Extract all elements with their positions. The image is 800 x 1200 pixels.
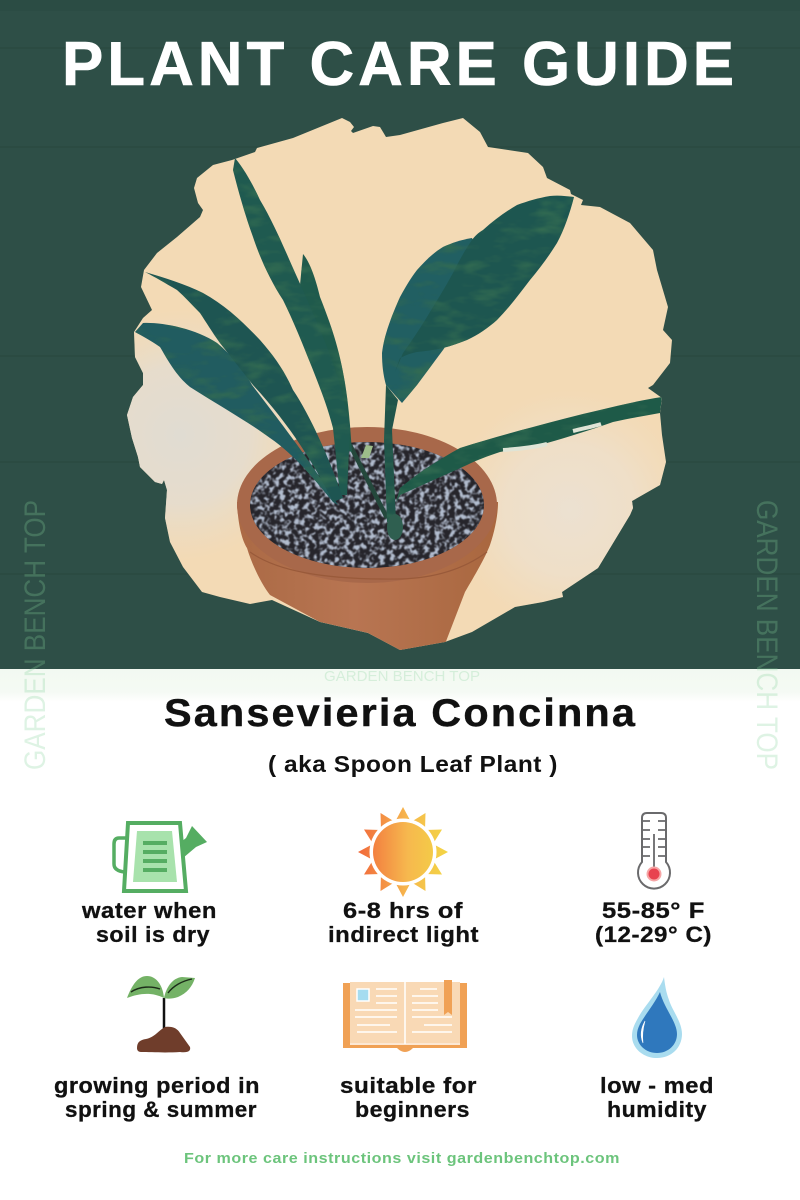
watermark: left vertical: GARDEN BENCH TOP xyxy=(19,500,52,770)
leaves xyxy=(135,158,662,522)
label: humidity: humidity xyxy=(607,1097,707,1122)
label: temperature: 55-85° F xyxy=(602,898,705,923)
background: dark green wood planks xyxy=(0,0,800,670)
watermark: right vertical: GARDEN BENCH TOP xyxy=(750,500,783,770)
leaf white streak xyxy=(503,424,601,450)
lower white panel xyxy=(0,669,800,1200)
label: growing period xyxy=(54,1073,260,1122)
plant alias subheading: ( aka Spoon Leaf Plant ) xyxy=(268,751,558,777)
icon: thermometer xyxy=(638,813,670,889)
icon: sun xyxy=(358,807,448,897)
label: watering: water when xyxy=(81,898,217,923)
label: beginners: beginners xyxy=(355,1097,470,1122)
soil stem xyxy=(350,445,387,518)
label: beginners: suitable for xyxy=(340,1073,477,1098)
icon: sprout xyxy=(127,976,195,1052)
label: growing period: growing period in xyxy=(54,1073,260,1098)
footer link text: For more care instructions visit gardenbenchtop.com xyxy=(184,1150,620,1167)
photo: sansevieria in terracotta pot xyxy=(120,110,680,660)
terracotta pot xyxy=(237,427,498,652)
label: humidity xyxy=(600,1073,714,1122)
label: beginners xyxy=(340,1073,477,1122)
label: watering xyxy=(81,898,217,947)
title: PLANT CARE GUIDE xyxy=(62,30,738,99)
label: temperature: (12-29° C) xyxy=(595,922,712,947)
label: temperature xyxy=(595,898,712,947)
label: light: indirect light xyxy=(328,922,479,947)
icon: water drop xyxy=(632,977,682,1058)
plant name heading: Sansevieria Concinna xyxy=(164,692,637,735)
icon: open book xyxy=(343,980,467,1052)
label: light: 6-8 hrs of xyxy=(343,898,463,923)
leaf nub xyxy=(387,514,403,540)
label: growing period: spring & summer xyxy=(65,1097,257,1122)
watermark: center: GARDEN BENCH TOP xyxy=(324,668,480,685)
icon: watering can xyxy=(114,823,207,891)
small pale sprout xyxy=(361,445,373,458)
label: watering: soil is dry xyxy=(96,922,210,947)
label: humidity: low - med xyxy=(600,1073,714,1098)
label: light xyxy=(328,898,479,947)
